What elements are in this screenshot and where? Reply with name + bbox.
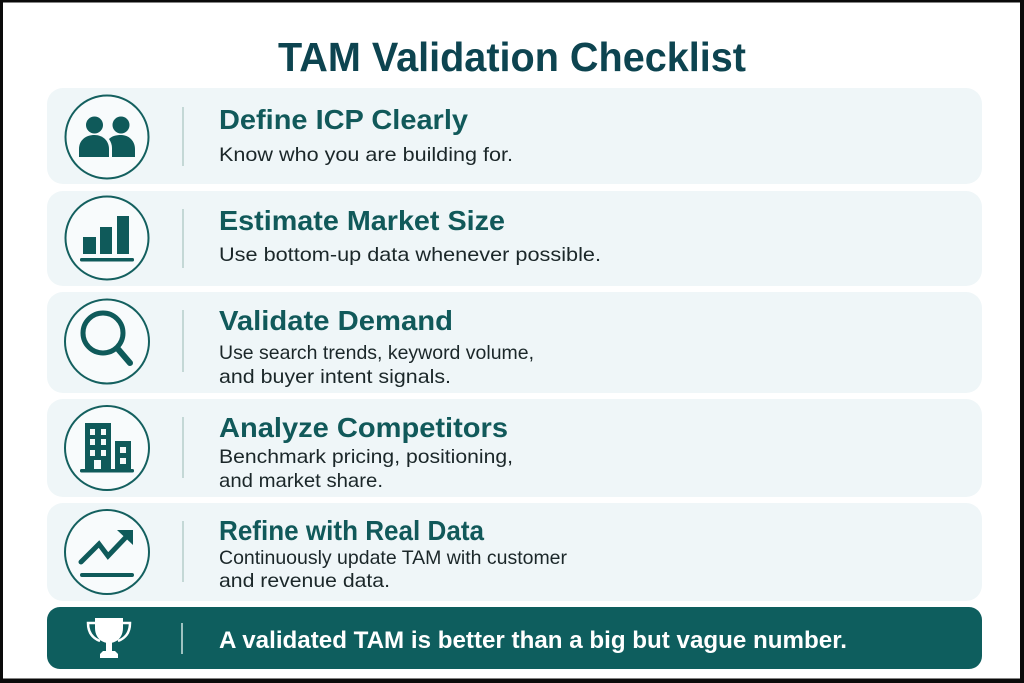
heading: Validate Demand	[219, 305, 453, 336]
panel: validate demand	[47, 292, 982, 393]
panel: analyze competitors: and market share.	[219, 470, 383, 492]
panel: refine with real data: and revenue data.	[219, 570, 390, 592]
panel: validate demand: and buyer intent signals.	[219, 366, 451, 388]
description: Use search trends, keyword volume,	[219, 342, 534, 364]
panel: estimate market size	[47, 191, 982, 286]
callout: conclusion banner	[47, 607, 982, 669]
heading: Analyze Competitors	[219, 412, 508, 443]
icon: buildings	[65, 406, 149, 490]
description: Benchmark pricing, positioning,	[219, 446, 513, 468]
icon: trophy	[88, 618, 130, 658]
panel: analyze competitors	[47, 399, 982, 497]
heading: Define ICP Clearly	[219, 104, 469, 135]
icon: magnifier	[65, 300, 149, 384]
heading: Estimate Market Size	[219, 205, 505, 236]
banner text: A validated TAM is better than a big but vague number.	[219, 627, 847, 654]
title: TAM Validation Checklist	[278, 34, 746, 80]
panel: refine with real data	[47, 503, 982, 601]
icon: bar chart	[66, 196, 148, 280]
icon: people	[66, 96, 148, 178]
description: Continuously update TAM with customer	[219, 547, 568, 569]
description: Use bottom-up data whenever possible.	[219, 244, 601, 266]
heading: Refine with Real Data	[219, 515, 485, 546]
panel: define ICP	[47, 88, 982, 184]
icon: trend line	[65, 510, 149, 594]
description: Know who you are building for.	[219, 144, 513, 166]
